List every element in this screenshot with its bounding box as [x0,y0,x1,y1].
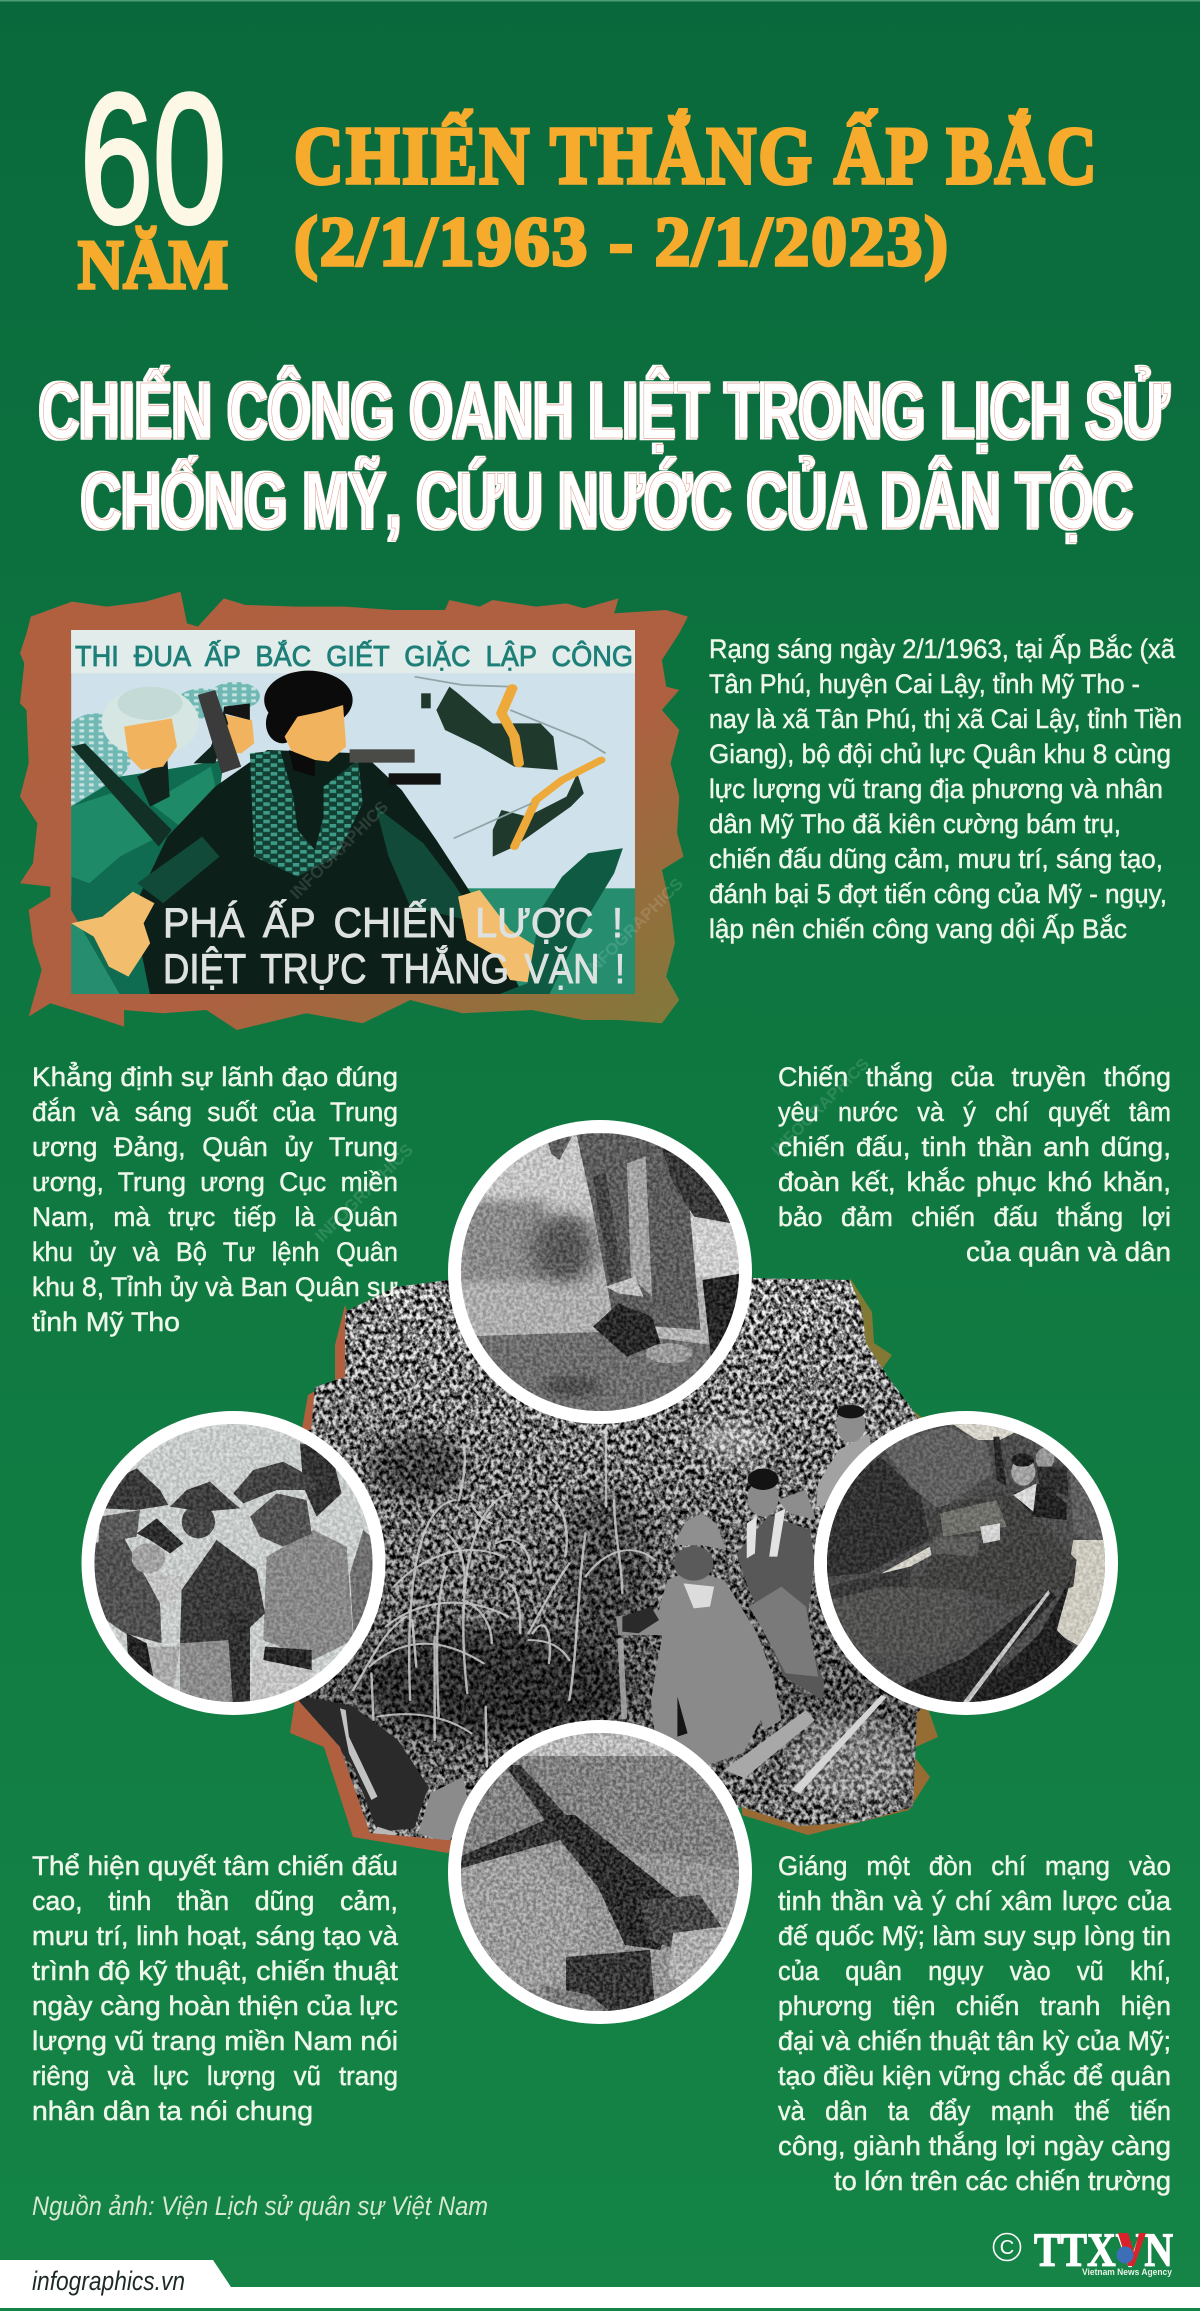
poster bottom slogan [163,899,625,992]
poster top slogan: THI ĐUA ẤP BẮC GIẾT GIẶC LẬP CÔNG [75,639,633,673]
panel: bottom right text block: phương tiện chiến tranh hiện [778,1991,1171,2021]
panel: right text block: chiến đấu, tinh thần anh dũng, [778,1132,1171,1162]
intro text: lực lượng vũ trang địa phương và nhân [709,774,1163,804]
watermarks: INFOGRAPHICS [581,874,687,980]
panel: left text block: ương Đảng, Quân ủy Trung [32,1132,398,1162]
grass blades [353,1430,655,1767]
panel: bottom right text block: tạo điều kiện vững chắc để quân [778,2061,1171,2091]
copyright mark [994,2234,1020,2260]
panel: bottom right text block: tinh thần và ý chí xâm lược của [778,1886,1171,1916]
circle photo: left, three soldiers [82,1411,386,1715]
intro text [709,634,1182,944]
intro text: Giang), bộ đội chủ lực Quân khu 8 cùng [709,739,1171,769]
panel: bottom left text block: mưu trí, linh hoạt, sáng tạo và [32,1921,398,1951]
wordmark: TTXVN [1034,2224,1173,2277]
panel: right text block: của quân và dân [966,1237,1171,1267]
foreground soldier and rock [300,1697,467,1843]
third soldier [816,1405,871,1507]
watermarks: INFOGRAPHICS [767,1054,873,1160]
panel: bottom left text block: cao, tinh thần dũng cảm, [32,1886,398,1916]
footer bar [0,2260,1200,2311]
intro text: lập nên chiến công vang dội Ấp Bắc [709,914,1127,944]
panel: bottom right text block: to lớn trên các chiến trường [834,2166,1171,2196]
agency name: Vietnam News Agency [1082,2267,1173,2278]
panel: left text block: Nam, mà trực tiếp là Quân [32,1202,398,1232]
jungle photo [270,1270,940,1850]
torn brown frame [20,592,688,1030]
panel: left text block: đắn và sáng suốt của Trung [32,1097,398,1127]
red V and globe [1116,2233,1146,2266]
site name: infographics.vn [32,2266,185,2296]
panel: bottom left text block: nhân dân ta nói chung [32,2096,313,2126]
panel: right text block: Chiến thắng của truyền thống [778,1062,1171,1092]
poster bottom slogan: DIỆT TRỰC THẮNG VẶN ! [163,944,625,992]
panel: right text block: đoàn kết, khắc phục khó khăn, [778,1167,1171,1197]
intro text: Tân Phú, huyện Cai Lậy, tỉnh Mỹ Tho - [709,669,1140,699]
poster artwork [59,630,636,995]
dark undergrowth [361,1420,912,1803]
panel: left text block: ương, Trung ương Cục miền [32,1167,398,1197]
intro text: dân Mỹ Tho đã kiên cường bám trụ, [709,809,1121,839]
circle photo: right, soldiers on boat [813,1411,1120,1715]
panel: bottom left text block: trình độ kỹ thuật, chiến thuật [32,1956,399,1986]
intro text: chiến đấu dũng cảm, mưu trí, sáng tạo, [709,844,1163,874]
panel: bottom right text block [778,1851,1171,2196]
intro text: nay là xã Tân Phú, thị xã Cai Lậy, tỉnh Tiền [709,704,1182,734]
logo: TTXVN [994,2224,1173,2278]
watermarks: INFOGRAPHICS [311,1140,417,1246]
brown backing left [290,1305,470,1853]
panel: right text block: yêu nước và ý chí quyết tâm [778,1097,1171,1127]
title: chiến thắng ấp bắc [294,109,1099,281]
panel: right text block: bảo đảm chiến đấu thắng lợi [778,1202,1171,1232]
second soldier [737,1469,824,1700]
olive backing right [742,1278,938,1835]
watermarks [286,797,873,1246]
circle photo: top, smoke and banana tree [448,1120,753,1424]
intro text: đánh bại 5 đợt tiến công của Mỹ - ngụy, [709,879,1167,909]
panel: left text block: khu 8, Tỉnh ủy và Ban Quân sự [32,1272,398,1302]
panel: bottom right text block: đế quốc Mỹ; làm suy sụp lòng tin [778,1921,1171,1951]
poster bottom slogan: PHÁ ẤP CHIẾN LƯỢC ! [163,899,623,946]
label năm: NĂM [78,227,228,304]
panel: left text block: khu ủy và Bộ Tư lệnh Quân [32,1237,398,1267]
copyright mark: C [1000,2237,1014,2259]
panel: bottom right text block: và dân ta đẩy mạnh thế tiến [778,2096,1171,2126]
image source credit: Nguồn ảnh: Viện Lịch sử quân sự Việt Nam [32,2191,488,2221]
panel: bottom left text block: Thể hiện quyết tâm chiến đấu [32,1851,398,1881]
panel: bottom left text block: lượng vũ trang miền Nam nói [32,2026,398,2056]
main heading [41,366,1171,545]
panel: bottom left text block: riêng và lực lượng vũ trang [32,2061,398,2091]
title: 60 năm [78,55,228,304]
intro text: Rạng sáng ngày 2/1/1963, tại Ấp Bắc (xã [709,634,1175,664]
panel: left text block [32,1062,398,1337]
number 60: 60 [80,55,226,261]
title dates: (2/1/1963 - 2/1/2023) [294,204,950,281]
panel: right text block [778,1062,1171,1267]
watermarks: INFOGRAPHICS [286,797,392,903]
panel: bottom right text block: công, giành thắng lợi ngày càng [778,2131,1171,2161]
panel: left text block: Khẳng định sự lãnh đạo đúng [32,1062,398,1092]
panel: bottom right text block: của quân ngụy vào vũ khí, [778,1956,1171,1986]
log and sticks [724,1710,815,1778]
panel: bottom left text block [32,1851,399,2126]
panel: poster with torn frame [20,592,688,1030]
circle photo: bottom, machine gun in the grass [448,1720,752,2024]
panel: bottom left text block: ngày càng hoàn thiện của lực [32,1991,398,2021]
panel: left text block: tỉnh Mỹ Tho [32,1307,180,1337]
soldier with pith helmet [616,1513,781,1765]
panel: jungle photo collage [270,1270,940,1853]
panel: bottom right text block: Giáng một đòn chí mạng vào [778,1851,1171,1881]
panel: bottom right text block: đại và chiến thuật tân kỳ của Mỹ; [778,2026,1171,2056]
